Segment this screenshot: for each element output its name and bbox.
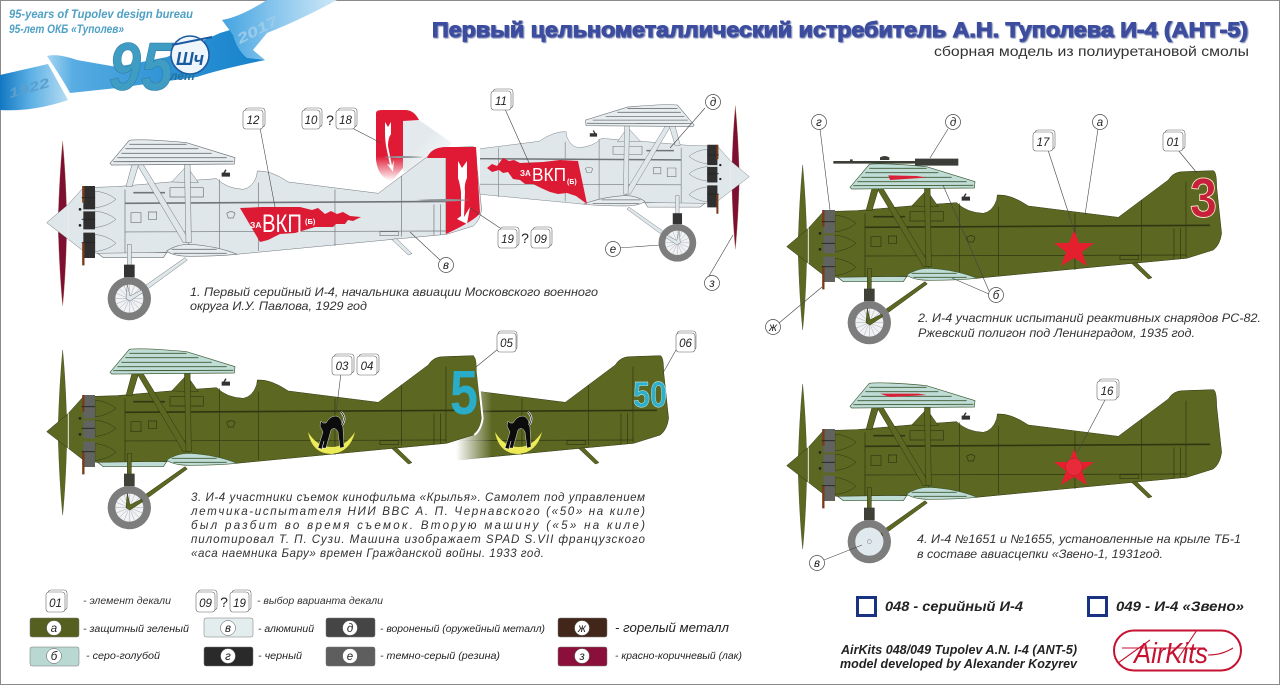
banner: 95 years ribbon: 1922 bbox=[7, 75, 52, 101]
callout: 19 ? 09 bbox=[498, 227, 552, 248]
caption 3: 3. И-4 участники съемок кинофильма «Крылья». Самолет под управлением bbox=[191, 491, 645, 504]
callout: 11: 11 bbox=[495, 96, 507, 108]
caption 3 bbox=[190, 491, 646, 560]
circle labels: г bbox=[816, 117, 822, 129]
leader lines bbox=[260, 108, 1197, 560]
banner: 95 years ribbon: 2017 bbox=[233, 12, 282, 47]
circle labels: ж bbox=[768, 322, 778, 334]
callout: 16 bbox=[1097, 379, 1119, 400]
detail: tail, right side view bbox=[376, 110, 452, 181]
caption 2: 2. И-4 участник испытаний реактивных снарядов РС-82. bbox=[917, 311, 1261, 325]
callout: 06 bbox=[676, 331, 696, 352]
callout: 12: 12 bbox=[247, 115, 260, 127]
legend swatch: в: - алюминий bbox=[258, 623, 314, 635]
legend: decal element: 01 bbox=[49, 598, 62, 610]
aircraft 4: green I-4 Zveno bbox=[787, 383, 1222, 563]
callout: 16: 16 bbox=[1101, 386, 1114, 398]
callout: 10 ? 18: 18 bbox=[339, 115, 352, 127]
legend: decal choice bbox=[196, 590, 383, 612]
aircraft 1: grey I-4 bbox=[47, 140, 482, 320]
caption 2: Ржевский полигон под Ленинградом, 1935 год. bbox=[918, 326, 1195, 340]
marking: cat insignia and number 5: 5 bbox=[450, 359, 478, 428]
callout: 05: 05 bbox=[500, 338, 513, 350]
circle labels: б bbox=[993, 290, 1000, 302]
callout: 17: 17 bbox=[1037, 137, 1050, 149]
legend swatch: е: е bbox=[347, 651, 353, 663]
legend swatch: г: г bbox=[225, 651, 231, 663]
legend swatch: б: б bbox=[51, 651, 58, 663]
callout: 05 bbox=[497, 331, 517, 352]
tail marking: red rudder bbox=[416, 147, 480, 234]
legend: decal element: - элемент декали bbox=[83, 596, 171, 607]
callout: 10 ? 18 bbox=[302, 108, 357, 129]
banner: 95 years ribbon: Шч bbox=[176, 49, 205, 69]
credits bbox=[840, 643, 1078, 671]
title: Первый цельнометаллический истребитель А.Н. Туполева И-4 (АНТ-5) bbox=[432, 19, 1248, 42]
caption 4: 4. И-4 №1651 и №1655, установленные на крыле ТБ-1 bbox=[917, 532, 1241, 546]
callout: 17 bbox=[1033, 130, 1055, 151]
caption 1: 1. Первый серийный И-4, начальника авиации Московского военного bbox=[190, 285, 598, 299]
callout: 06: 06 bbox=[679, 338, 692, 350]
aircraft 1b: grey I-4 right side view bbox=[480, 104, 750, 262]
legend swatch: в bbox=[204, 618, 314, 637]
legend swatch: д: - вороненый (оружейный металл) bbox=[380, 623, 545, 635]
legend swatch: е: - темно-серый (резина) bbox=[380, 650, 500, 662]
callout: 01 bbox=[1163, 130, 1185, 151]
banner marking: left side bbox=[240, 207, 361, 242]
banner marking: right side: ЗА bbox=[520, 169, 531, 178]
legend swatch: д: д bbox=[347, 623, 353, 635]
kit option: 049: 049 - И-4 «Звено» bbox=[1116, 598, 1244, 614]
legend swatch: е bbox=[326, 647, 500, 666]
banner marking: left side: ВКП bbox=[262, 210, 302, 238]
logo: AirKits: AirKits bbox=[1132, 638, 1208, 670]
caption 4: в составе авиасцепки «Звено-1, 1931год. bbox=[917, 547, 1163, 561]
circle labels: в bbox=[814, 558, 820, 570]
caption 3: был разбит во время съемок. Вторую машину («5» на киле) bbox=[191, 519, 645, 532]
legend swatch: з bbox=[558, 647, 742, 666]
callout: 19 ? 09: 19 bbox=[501, 234, 514, 246]
subtitle: сборная модель из полиуретановой смолы bbox=[934, 43, 1249, 59]
callout: 03 04: 04 bbox=[361, 361, 373, 373]
caption 2 bbox=[917, 311, 1261, 340]
legend swatch: а: а bbox=[51, 623, 57, 635]
callout: 11 bbox=[491, 89, 513, 110]
marking: red star and number 3 bbox=[1054, 166, 1217, 266]
legend swatch: г: - черный bbox=[258, 650, 302, 662]
credits: model developed by Alexander Kozyrev bbox=[840, 657, 1078, 671]
legend swatch: г bbox=[204, 647, 302, 666]
kit option: 048: 048 - серийный И-4 bbox=[885, 598, 1023, 614]
banner: 95 years ribbon: 95 bbox=[109, 29, 174, 105]
legend swatch: а: - защитный зеленый bbox=[83, 623, 189, 635]
legend swatch: ж bbox=[558, 618, 730, 637]
legend swatch: а bbox=[30, 618, 189, 637]
logo: AirKits bbox=[1114, 630, 1241, 670]
banner: 95 years ribbon bbox=[0, 0, 337, 110]
callout: 19 ? 09: 09 bbox=[534, 234, 547, 246]
callout: 12 bbox=[243, 108, 265, 129]
circle labels: а bbox=[1097, 117, 1103, 129]
legend swatch: б bbox=[30, 647, 160, 666]
caption 4 bbox=[917, 532, 1241, 561]
legend: decal choice: 09 bbox=[199, 598, 212, 610]
marking: star with disc bbox=[1054, 449, 1094, 485]
legend: decal choice: - выбор варианта декали bbox=[257, 595, 383, 607]
caption 3: пилотировал Т. П. Сузи. Машина изображает SPAD S.VII французского bbox=[191, 533, 646, 546]
circle labels: д bbox=[950, 117, 956, 129]
legend swatch: ж: ж bbox=[577, 623, 587, 635]
credits: AirKits 048/049 Tupolev A.N. I-4 (ANT-5) bbox=[840, 643, 1077, 657]
marking: red star and number 3: 3 bbox=[1190, 166, 1217, 229]
callout: 10 ? 18: 10 bbox=[305, 115, 318, 127]
callout: 03 04 bbox=[332, 354, 379, 375]
legend swatch: д bbox=[326, 618, 545, 637]
legend: decal element bbox=[46, 590, 171, 612]
aircraft 2: green I-4 with rockets bbox=[787, 156, 1222, 344]
kit option: 049 bbox=[1088, 598, 1244, 616]
banner marking: right side: ВКП bbox=[532, 165, 566, 185]
caption 3: «аса наемника Бару» времен Гражданской войны. 1933 год. bbox=[191, 547, 544, 560]
circle labels: д bbox=[710, 97, 716, 109]
banner: 95 years ribbon: лет bbox=[169, 69, 195, 83]
legend swatch: ж: - горелый металл bbox=[615, 620, 730, 635]
circle labels: в bbox=[443, 260, 449, 272]
legend swatch: з: з bbox=[578, 651, 585, 663]
circle labels bbox=[438, 94, 1108, 570]
legend swatch: в: в bbox=[225, 623, 231, 635]
circle labels: з bbox=[708, 278, 715, 290]
caption 3: летчика-испытателя НИИ ВВС А. П. Чернавского («50» на киле) bbox=[190, 505, 645, 518]
banner caption bbox=[9, 9, 193, 36]
legend: decal choice: ? bbox=[220, 594, 228, 610]
marking: cat insignia and number 5 bbox=[308, 359, 478, 454]
aircraft 3b: second green I-4 tail bbox=[458, 355, 669, 464]
callout: 03 04: 03 bbox=[336, 361, 349, 373]
caption 1 bbox=[190, 285, 598, 313]
legend swatch: з: - красно-коричневый (лак) bbox=[615, 650, 742, 662]
callout: 10 ? 18: ? bbox=[326, 112, 334, 128]
legend: decal choice: 19 bbox=[233, 598, 246, 610]
legend swatch: б: - серо-голубой bbox=[86, 650, 160, 662]
banner marking: right side bbox=[487, 158, 587, 204]
banner marking: left side: ЗА bbox=[250, 220, 261, 230]
banner marking: left side: (Б) bbox=[305, 217, 316, 226]
circle labels: е bbox=[610, 244, 616, 256]
callout: 01: 01 bbox=[1167, 137, 1179, 149]
aircraft 3b: second green I-4 tail: 50 bbox=[633, 374, 667, 415]
aircraft 3: green I-4 with number 5 bbox=[47, 349, 483, 529]
callout: 19 ? 09: ? bbox=[521, 230, 529, 246]
banner marking: right side: (Б) bbox=[567, 179, 577, 186]
banner caption: 95-лет ОКБ «Туполев» bbox=[9, 24, 125, 36]
caption 1: округа И.У. Павлова, 1929 год bbox=[190, 299, 367, 313]
banner caption: 95-years of Tupolev design bureau bbox=[9, 9, 193, 21]
